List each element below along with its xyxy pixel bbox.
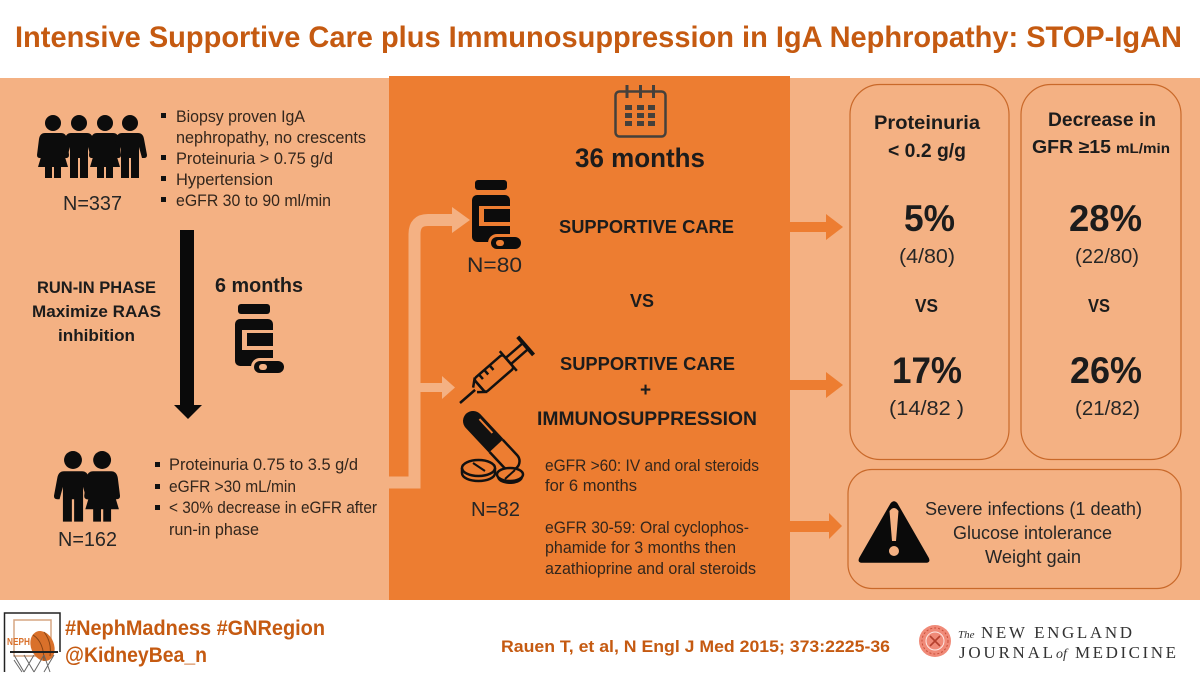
logo: NephMadness hoop: [4, 613, 60, 672]
icon: syringe: [451, 336, 534, 413]
logo: New England Journal of Medicine: MEDICINE: [1075, 643, 1176, 662]
arm 2 regimen details: eGFR >60: IV and oral steroids: [545, 456, 759, 475]
icon: calendar: [616, 85, 666, 136]
card: proteinuria outcome: (4/80): [899, 246, 955, 268]
arm 1 label: SUPPORTIVE CARE: [559, 216, 734, 237]
panel: randomized arms: [378, 76, 790, 600]
panel: outcomes: [790, 78, 1200, 600]
treatment duration: 36 months: [575, 143, 705, 173]
logo: New England Journal of Medicine: JOURNAL: [959, 643, 1053, 662]
arm 2 label: +: [640, 380, 651, 401]
inclusion criteria list: [161, 107, 366, 210]
card: GFR decrease outcome: GFR ≥15: [1032, 137, 1111, 157]
card: GFR decrease outcome: (22/80): [1075, 246, 1139, 268]
card: proteinuria outcome: VS: [915, 296, 938, 316]
arm 2 count: N=82: [471, 499, 520, 521]
icon: capsule and tablets: [459, 407, 524, 484]
adverse events list: Weight gain: [985, 546, 1081, 567]
arm 2 label: IMMUNOSUPPRESSION: [537, 408, 757, 430]
citation: Rauen T, et al, N Engl J Med 2015; 373:2225-36: [501, 637, 890, 656]
card: GFR decrease outcome: 26%: [1070, 350, 1142, 391]
arrow: run-in to randomized: [174, 230, 202, 419]
arrow: adverse events: [790, 513, 842, 539]
arm 2 regimen details: for 6 months: [545, 476, 637, 495]
run-in phase label: inhibition: [58, 326, 135, 345]
arm 2 regimen details: eGFR 30-59: Oral cyclophos-: [545, 518, 749, 537]
arrow: immunosuppression outcome: [790, 372, 843, 398]
adverse events list: Severe infections (1 death): [925, 498, 1142, 519]
card: proteinuria outcome: 17%: [892, 350, 962, 391]
logo: NephMadness hoop: NEPH: [7, 636, 30, 648]
card: proteinuria outcome: (14/82 ): [889, 398, 964, 420]
card: GFR decrease outcome: 28%: [1069, 198, 1142, 239]
logo: New England Journal of Medicine: of: [1056, 647, 1069, 662]
card: GFR decrease outcome: mL/min: [1116, 140, 1170, 156]
icon: pill bottle: [472, 180, 524, 252]
arrow: supportive care outcome: [790, 214, 843, 240]
arm 2 regimen details: phamide for 3 months then: [545, 538, 736, 557]
arm 2 label: SUPPORTIVE CARE: [560, 353, 735, 374]
versus: VS: [630, 290, 654, 311]
run-in phase label: [32, 278, 161, 345]
logo seal: [919, 625, 951, 657]
arm 2 label: [537, 353, 757, 430]
randomized count: N=162: [58, 529, 117, 551]
inclusion criteria list: Hypertension: [176, 170, 273, 189]
adverse events list: Glucose intolerance: [953, 522, 1112, 543]
arm 2 regimen details: [545, 456, 759, 578]
arm 1 count: N=80: [467, 254, 522, 277]
enrolled count: N=337: [63, 193, 122, 215]
randomization criteria list: Proteinuria 0.75 to 3.5 g/d: [169, 455, 358, 474]
card: proteinuria outcome: < 0.2 g/g: [888, 141, 966, 162]
hashtags: #NephMadness #GNRegion: [65, 616, 325, 640]
randomization criteria list: eGFR >30 mL/min: [169, 477, 296, 496]
card: GFR decrease outcome: Decrease in: [1048, 110, 1156, 131]
title: Intensive Supportive Care plus Immunosuppression in IgA Nephropathy: STOP-IgAN: [15, 21, 1182, 54]
run-in phase label: Maximize RAAS: [32, 302, 161, 321]
inclusion criteria list: eGFR 30 to 90 ml/min: [176, 191, 331, 210]
logo: New England Journal of Medicine: [919, 623, 1176, 662]
card: adverse events: [848, 470, 1181, 588]
arm 2 regimen details: azathioprine and oral steroids: [545, 559, 756, 578]
inclusion criteria list: Biopsy proven IgA: [176, 107, 306, 126]
icon: warning triangle: [859, 502, 929, 562]
icon: four people: [37, 115, 147, 178]
icon: pill bottle: [235, 304, 287, 376]
logo: New England Journal of Medicine: NEW ENGLAND: [981, 623, 1132, 642]
icon: two people: [54, 451, 120, 522]
card: proteinuria outcome: Proteinuria: [874, 113, 980, 134]
card: GFR decrease outcome: (21/82): [1075, 398, 1140, 420]
inclusion criteria list: Proteinuria > 0.75 g/d: [176, 149, 333, 168]
card: proteinuria outcome: [850, 84, 1009, 460]
card: GFR decrease outcome: [1021, 84, 1181, 460]
randomization criteria list: < 30% decrease in eGFR after: [169, 498, 377, 517]
randomization criteria list: [155, 455, 377, 539]
run-in duration: 6 months: [215, 275, 303, 297]
twitter handle: @KidneyBea_n: [65, 643, 207, 667]
card: GFR decrease outcome: VS: [1088, 296, 1110, 316]
inclusion criteria list: nephropathy, no crescents: [176, 128, 366, 147]
adverse events list: [925, 498, 1142, 567]
logo: New England Journal of Medicine: The: [958, 629, 975, 641]
panel: trial enrollment: [0, 78, 389, 600]
card: proteinuria outcome: 5%: [904, 198, 955, 239]
randomization criteria list: run-in phase: [169, 520, 259, 539]
arrow: branches to both arms: [378, 207, 470, 482]
run-in phase label: RUN-IN PHASE: [37, 278, 156, 297]
